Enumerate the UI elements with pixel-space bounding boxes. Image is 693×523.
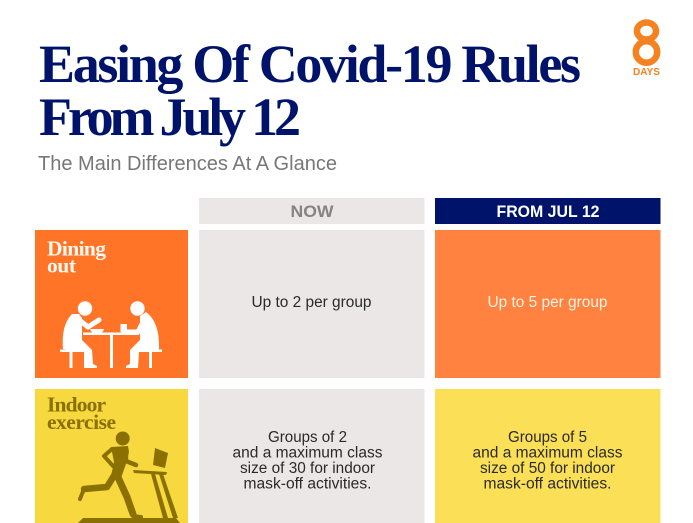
title: [39, 34, 581, 147]
panel: indoor exercise from Jul 12: [435, 389, 660, 523]
title: From July 12: [39, 87, 301, 147]
column header: from Jul 12: [435, 198, 660, 224]
panel: indoor exercise from Jul 12: size of 50 for indoor: [480, 460, 615, 477]
logo: 8 Days: [633, 22, 660, 78]
column header: now: [199, 198, 424, 224]
panel: indoor exercise now: [199, 389, 424, 523]
panel: dining from Jul 12: Up to 5 per group: [488, 294, 608, 311]
heading: dining out: [47, 236, 106, 278]
column header: from Jul 12: FROM JUL 12: [496, 202, 600, 221]
panel: dining from Jul 12: [435, 230, 660, 378]
column header: now: NOW: [290, 202, 334, 221]
panel: dining now: Up to 2 per group: [252, 294, 372, 311]
heading: indoor exercise: exercise: [47, 410, 116, 434]
subtitle: The Main Differences At A Glance: [38, 153, 337, 175]
panel: indoor exercise from Jul 12: mask-off activities.: [484, 476, 612, 492]
heading: dining out: Dining: [47, 236, 106, 260]
icon: two people dining: [60, 301, 162, 368]
panel: indoor exercise now: size of 30 for indoor: [240, 460, 375, 477]
panel: dining now: [199, 230, 424, 378]
panel: indoor exercise from Jul 12: Groups of 5: [508, 429, 587, 446]
logo: 8 Days: DAYS: [633, 67, 660, 78]
heading: indoor exercise: Indoor: [47, 392, 106, 416]
panel: indoor exercise now: and a maximum class: [232, 444, 383, 462]
panel: indoor exercise label: [35, 389, 188, 523]
panel: indoor exercise from Jul 12: and a maximum class: [472, 444, 623, 462]
title: Easing Of Covid-19 Rules: [39, 34, 581, 94]
icon: person on treadmill: [78, 432, 180, 523]
heading: dining out: out: [47, 254, 77, 278]
panel: indoor exercise now: mask-off activities.: [244, 476, 372, 492]
panel: dining out label: [35, 230, 188, 378]
panel: indoor exercise now: Groups of 2: [268, 429, 347, 446]
heading: indoor exercise: [47, 392, 116, 434]
